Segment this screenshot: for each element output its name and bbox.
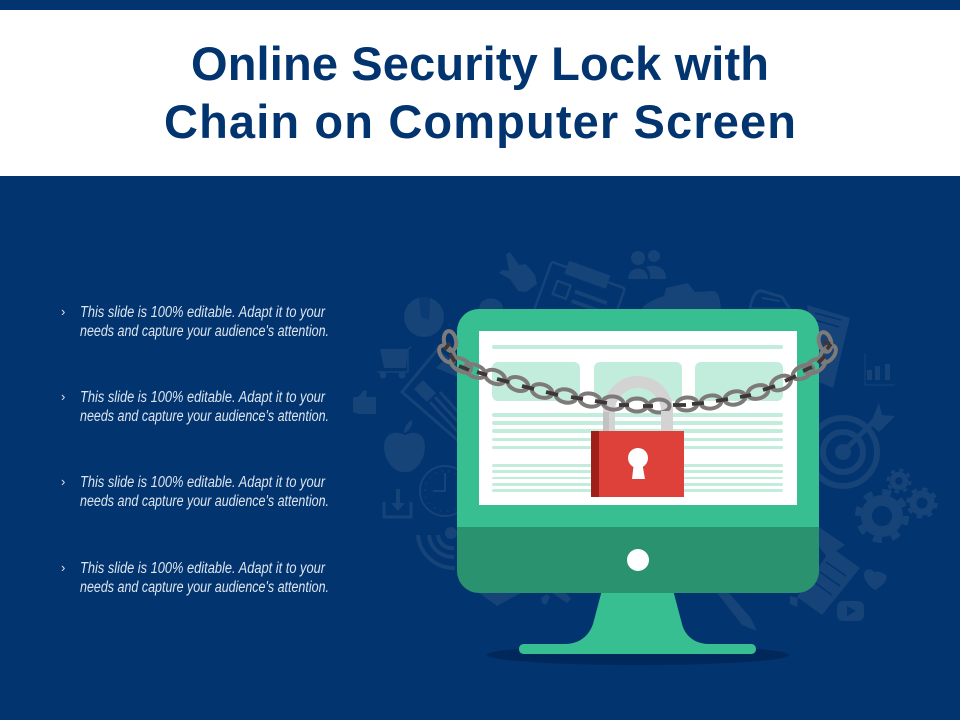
bullet 3	[61, 474, 329, 510]
icon: tools	[541, 593, 571, 605]
icon: tablet	[402, 350, 462, 444]
keyhole	[628, 448, 648, 479]
icon: document	[750, 291, 790, 309]
bullet 2: needs and capture your audience's attention.	[80, 408, 329, 425]
icon: document sheet	[807, 305, 850, 388]
monitor stand	[519, 590, 756, 654]
bullet 3: ›	[61, 474, 65, 489]
icon: light bulb	[479, 298, 503, 309]
monitor	[457, 309, 819, 665]
bullet list	[61, 304, 329, 596]
icon: large gear	[858, 492, 906, 540]
bullet 1	[61, 304, 329, 340]
icon: camera	[642, 283, 721, 309]
padlock shackle	[603, 382, 667, 431]
icon: heart	[864, 569, 887, 590]
bullet 4: ›	[61, 560, 65, 575]
icon: shopping cart	[377, 347, 411, 378]
bullet 2	[61, 389, 329, 425]
bullet 1: This slide is 100% editable. Adapt it to your	[80, 304, 326, 321]
icon: small gear	[888, 470, 910, 492]
icon: clock	[420, 466, 470, 516]
icon: video play	[837, 601, 864, 621]
icon: thumbs up	[353, 390, 376, 414]
bullet 1: needs and capture your audience's attention.	[80, 323, 329, 340]
faint background icons	[353, 250, 936, 631]
monitor frame	[457, 309, 819, 527]
padlock shackle front overlap	[661, 411, 673, 431]
title	[164, 37, 796, 148]
icon: clipboard	[527, 255, 627, 356]
icon: envelope and newspaper	[790, 527, 860, 615]
title: Chain on Computer Screen	[164, 95, 796, 148]
stand shadow	[487, 645, 789, 665]
icon: pencil	[717, 593, 757, 631]
power button	[627, 549, 649, 571]
screen	[479, 331, 797, 505]
bullet 2: This slide is 100% editable. Adapt it to your	[80, 389, 326, 406]
icon: apple	[384, 420, 425, 472]
bullet 1: ›	[61, 304, 65, 319]
title: Online Security Lock with	[191, 37, 769, 90]
bullet 3: needs and capture your audience's attention.	[80, 493, 329, 510]
icon: wifi signal	[418, 529, 455, 568]
icon: download tray	[384, 489, 411, 517]
bullet 4: This slide is 100% editable. Adapt it to your	[80, 560, 326, 577]
bullet 3: This slide is 100% editable. Adapt it to your	[80, 474, 326, 491]
web page placeholder content	[492, 345, 783, 492]
bullet 2: ›	[61, 389, 65, 404]
chain	[436, 330, 839, 412]
padlock body	[591, 431, 684, 497]
icon: pie chart	[404, 297, 444, 337]
monitor chin	[457, 527, 819, 593]
icon: people	[628, 250, 666, 279]
title banner	[0, 10, 960, 176]
icon: medium gear	[908, 489, 936, 517]
bullet 4: needs and capture your audience's attention.	[80, 579, 329, 596]
icon: bar chart	[865, 353, 895, 385]
icon: target with arrow	[809, 403, 895, 486]
icon: book	[479, 593, 521, 606]
bullet 4	[61, 560, 329, 596]
icon: pointing hand	[499, 252, 537, 292]
